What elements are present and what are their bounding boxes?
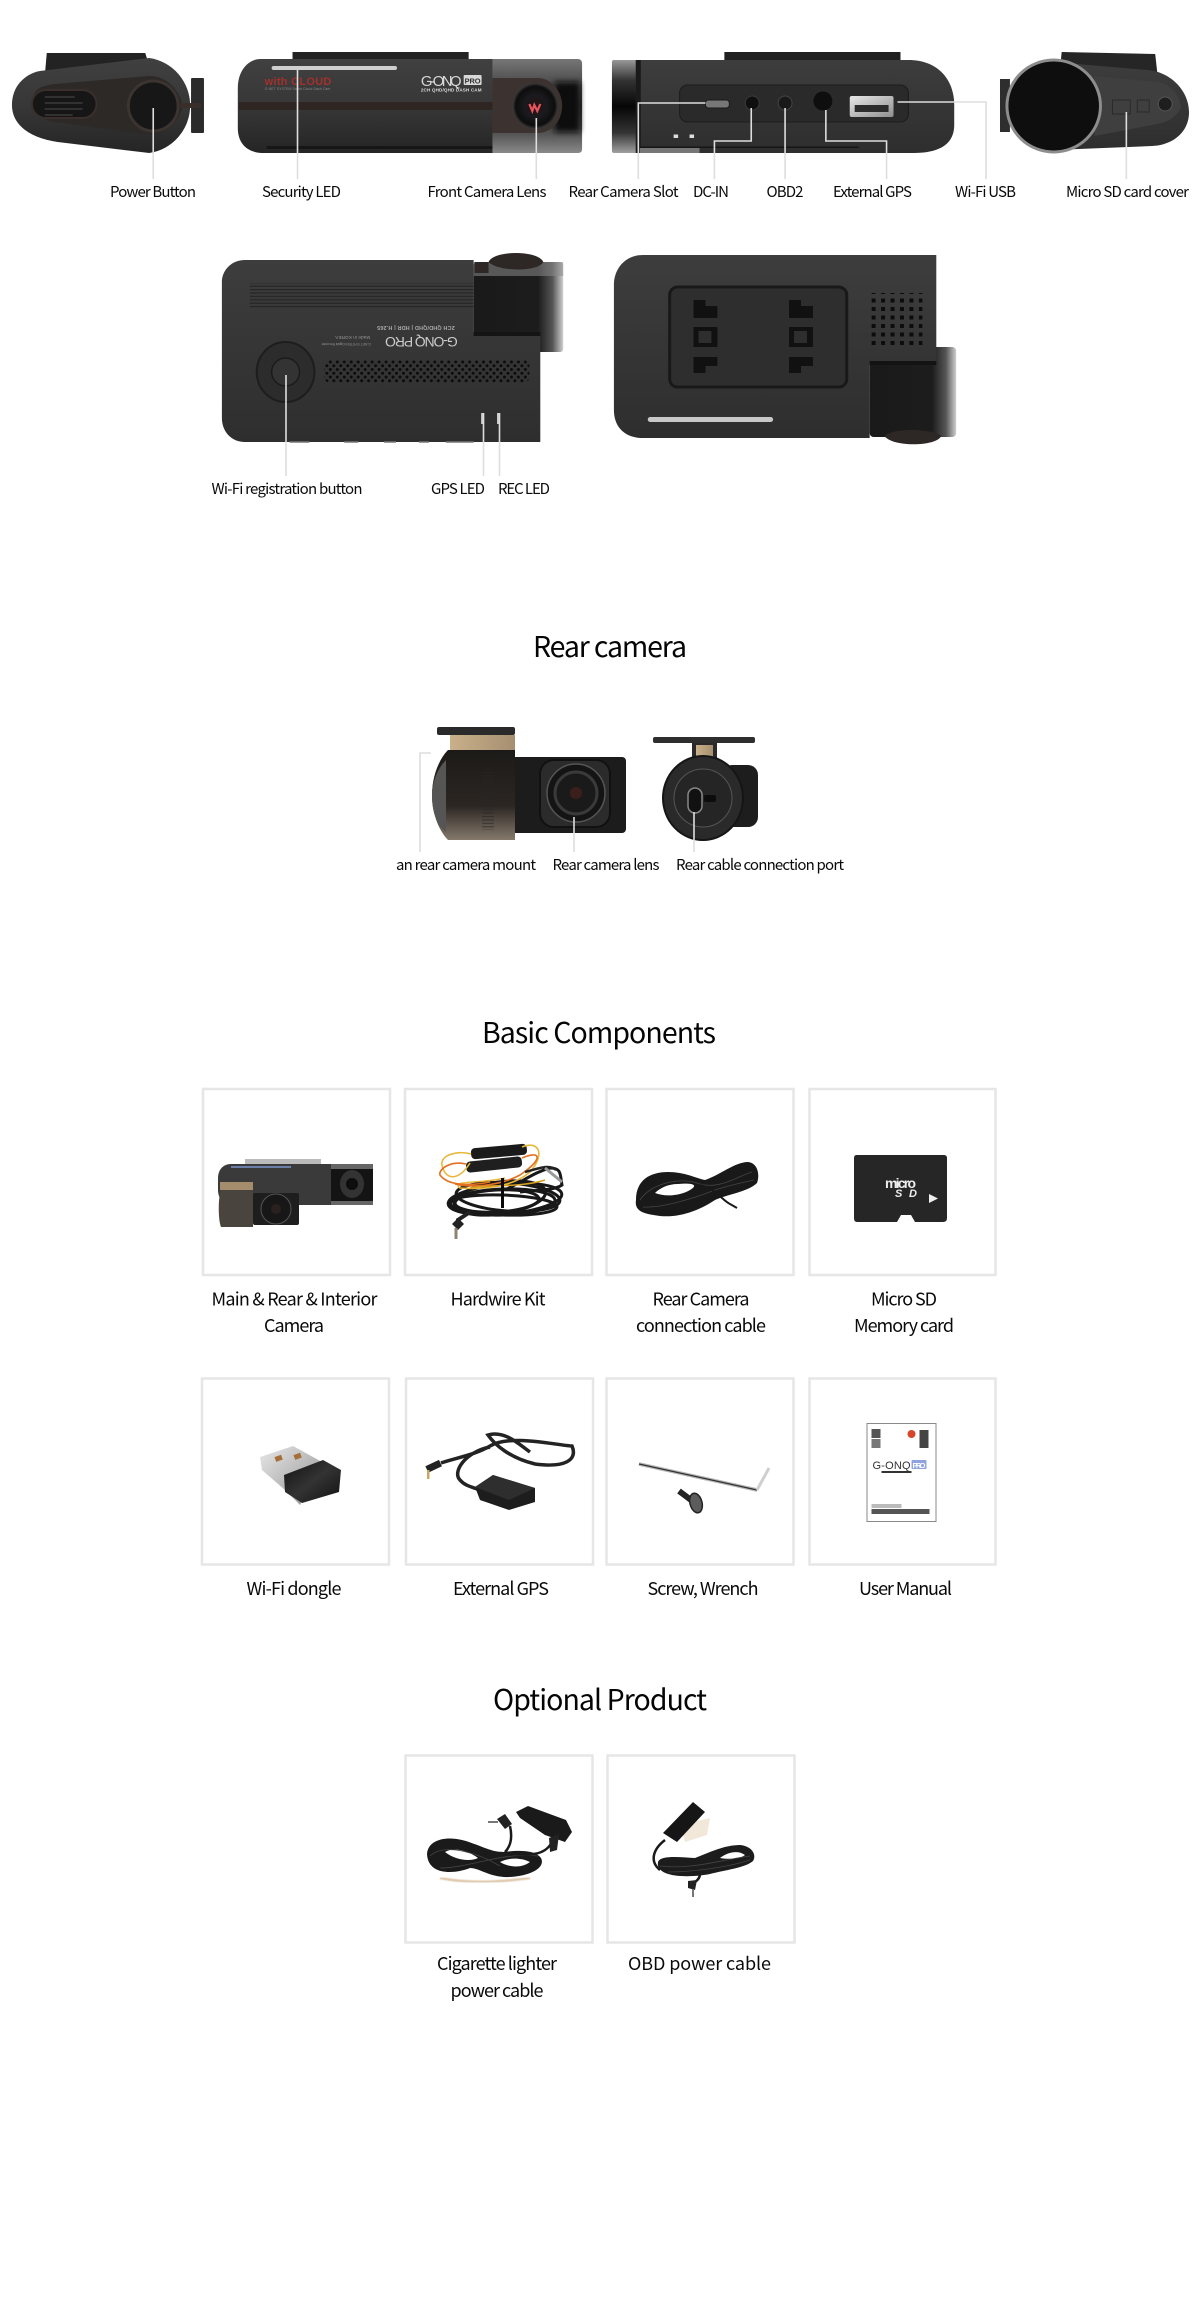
labels: components row 1: connection cable — [636, 1312, 766, 1338]
labels: components row 1: Micro SD — [871, 1286, 937, 1312]
leader lines: top row right — [638, 102, 1126, 179]
labels: optional products: OBD power cable — [628, 1950, 771, 1976]
rear camera — [220, 1182, 253, 1190]
labels: top row: Wi-Fi USB — [955, 181, 1016, 202]
labels: components row 2: External GPS — [453, 1575, 549, 1601]
panel: camera front view — [238, 52, 582, 153]
lighter plug — [516, 1806, 572, 1842]
mount plate — [670, 287, 847, 387]
leader lines and labels: rear camera: Rear camera lens — [552, 854, 660, 875]
labels: optional products: Cigarette lighter — [437, 1950, 558, 1976]
card: screw and wrench — [606, 1378, 794, 1564]
panel: camera top view with Wi-Fi button — [222, 253, 563, 442]
card: external GPS — [406, 1378, 593, 1564]
cable — [441, 1434, 573, 1490]
labels: top row: Rear Camera Slot — [568, 181, 679, 202]
panel: rear camera back — [653, 737, 758, 840]
jack — [688, 1880, 697, 1890]
card: user manual — [810, 1378, 996, 1564]
USB port — [850, 96, 894, 117]
panel: camera top view with Wi-Fi button: G-ONQ PRO — [385, 334, 458, 350]
card: OBD power cable — [608, 1756, 794, 1942]
screw — [679, 1491, 691, 1500]
labels: top row: OBD2 — [766, 181, 804, 202]
labels: components row 2 — [246, 1575, 952, 1601]
cable coil — [636, 1162, 758, 1216]
wrench — [639, 1464, 757, 1490]
plate slots — [694, 300, 813, 373]
leader lines and labels: second row: Wi-Fi registration button — [212, 478, 362, 499]
panel: camera top view with Wi-Fi button: Made in KOREA — [335, 335, 370, 340]
LEDs — [481, 413, 484, 424]
body — [614, 255, 936, 438]
card: micro SD memory card: SD — [895, 1188, 917, 1200]
panel: camera front view: G-ONQ — [421, 73, 462, 90]
barrel — [510, 757, 626, 833]
body — [1054, 62, 1189, 150]
panel: camera front view: PRO — [465, 76, 481, 86]
lens barrel — [493, 59, 582, 153]
SD card — [854, 1155, 947, 1222]
upside-down print: 2CH QHD/QHD | HDR | H.265 — [377, 324, 455, 330]
leader lines and labels: second row: REC LED — [498, 478, 550, 499]
labels: components row 1: Memory card — [854, 1312, 954, 1338]
metal plug — [260, 1446, 322, 1505]
labels: components row 1: Main & Rear & Interior — [212, 1286, 379, 1312]
heading: Rear camera: Rear camera — [533, 625, 687, 666]
coiled wires — [447, 1168, 563, 1220]
leader lines and labels: rear camera: Rear cable connection port — [676, 854, 844, 875]
leader lines and labels: rear camera: an rear camera mount — [396, 854, 536, 875]
lens — [540, 760, 610, 827]
OBD module — [680, 1818, 710, 1842]
body — [238, 59, 493, 153]
micro USB port — [705, 100, 729, 108]
cable coil — [427, 1839, 542, 1877]
DC jack — [813, 92, 832, 110]
labels: components row 1: Rear Camera — [652, 1286, 750, 1312]
leader lines and labels: second row — [212, 375, 550, 499]
adhesive mount — [45, 53, 149, 76]
lens barrel — [870, 347, 956, 437]
heading: Optional Product: Optional Product — [493, 1678, 707, 1719]
leader lines and labels: rear camera — [396, 753, 844, 875]
logo text: with CLOUD — [264, 76, 331, 88]
main camera — [218, 1159, 373, 1227]
cable port — [688, 788, 702, 813]
labels: components row 2: User Manual — [859, 1575, 952, 1601]
speaker grille — [324, 360, 529, 383]
panel: camera side view with power button — [12, 53, 204, 153]
booklet: G-ONQ — [872, 1460, 911, 1472]
panel: camera top view with Wi-Fi button: G-NET SYSTEM Digital Recorder — [321, 342, 371, 346]
panel: rear camera side — [432, 727, 626, 840]
card: hardwire kit — [405, 1089, 592, 1275]
booklet — [867, 1424, 936, 1522]
labels: components row 2: Wi-Fi dongle — [246, 1575, 342, 1601]
OBD jack — [778, 96, 792, 110]
lens barrel — [474, 262, 563, 352]
leader lines: top row left — [153, 70, 536, 179]
card: main and rear camera — [203, 1089, 390, 1275]
translucent housing — [432, 750, 515, 840]
camera body — [12, 58, 190, 153]
GPS module — [475, 1475, 535, 1510]
security LED bar — [272, 66, 397, 70]
labels: components row 1 — [212, 1286, 954, 1338]
labels: optional products — [437, 1950, 771, 2003]
SD cover — [1095, 76, 1181, 136]
labels: components row 1: Hardwire Kit — [450, 1286, 546, 1312]
card: micro SD memory card — [810, 1089, 996, 1275]
mount — [293, 52, 469, 62]
labels: top row — [110, 181, 1189, 202]
leader lines and labels: second row: GPS LED — [431, 478, 485, 499]
coloured wires — [442, 1145, 539, 1188]
panel: camera rear end view — [1000, 52, 1189, 152]
jack — [497, 1814, 512, 1829]
panel: camera front view: G-NET SYSTEM Smart Cloud Dash Cam — [265, 87, 330, 91]
Wi-Fi registration button — [257, 342, 314, 402]
mount — [437, 727, 515, 735]
body — [222, 260, 540, 442]
labels: top row: Security LED — [262, 181, 341, 202]
GPS jack — [745, 96, 759, 110]
labels: top row: Micro SD card cover — [1066, 181, 1189, 202]
labels: top row: DC-IN — [693, 181, 729, 202]
speaker holes — [869, 293, 922, 345]
labels: top row: External GPS — [833, 181, 912, 202]
card: micro SD memory card: micro — [885, 1175, 916, 1191]
heading: Basic Components: Basic Components — [482, 1011, 716, 1052]
panel: camera ports view — [612, 52, 954, 153]
lens side — [612, 60, 640, 153]
power button — [128, 81, 178, 131]
labels: optional products: power cable — [450, 1977, 544, 2003]
panel: camera mount plate view — [614, 255, 956, 444]
labels: top row: Front Camera Lens — [428, 181, 546, 202]
labels: components row 1: Camera — [264, 1312, 324, 1338]
card: cigarette lighter power cable — [406, 1756, 592, 1942]
booklet: PRO — [912, 1461, 926, 1470]
labels: top row: Power Button — [110, 181, 196, 202]
LED bar — [648, 417, 773, 422]
port panel — [680, 85, 908, 122]
card: rear camera connection cable — [606, 1089, 794, 1275]
card: Wi-Fi dongle — [202, 1378, 389, 1564]
fuse holders — [471, 1144, 527, 1159]
panel: camera front view: 2CH QHD/QHD DASH CAM — [421, 87, 482, 93]
vent — [32, 90, 97, 118]
labels: components row 2: Screw, Wrench — [648, 1575, 758, 1601]
cable coil — [654, 1840, 665, 1870]
dongle cap — [284, 1460, 341, 1503]
end circle — [1007, 60, 1100, 152]
